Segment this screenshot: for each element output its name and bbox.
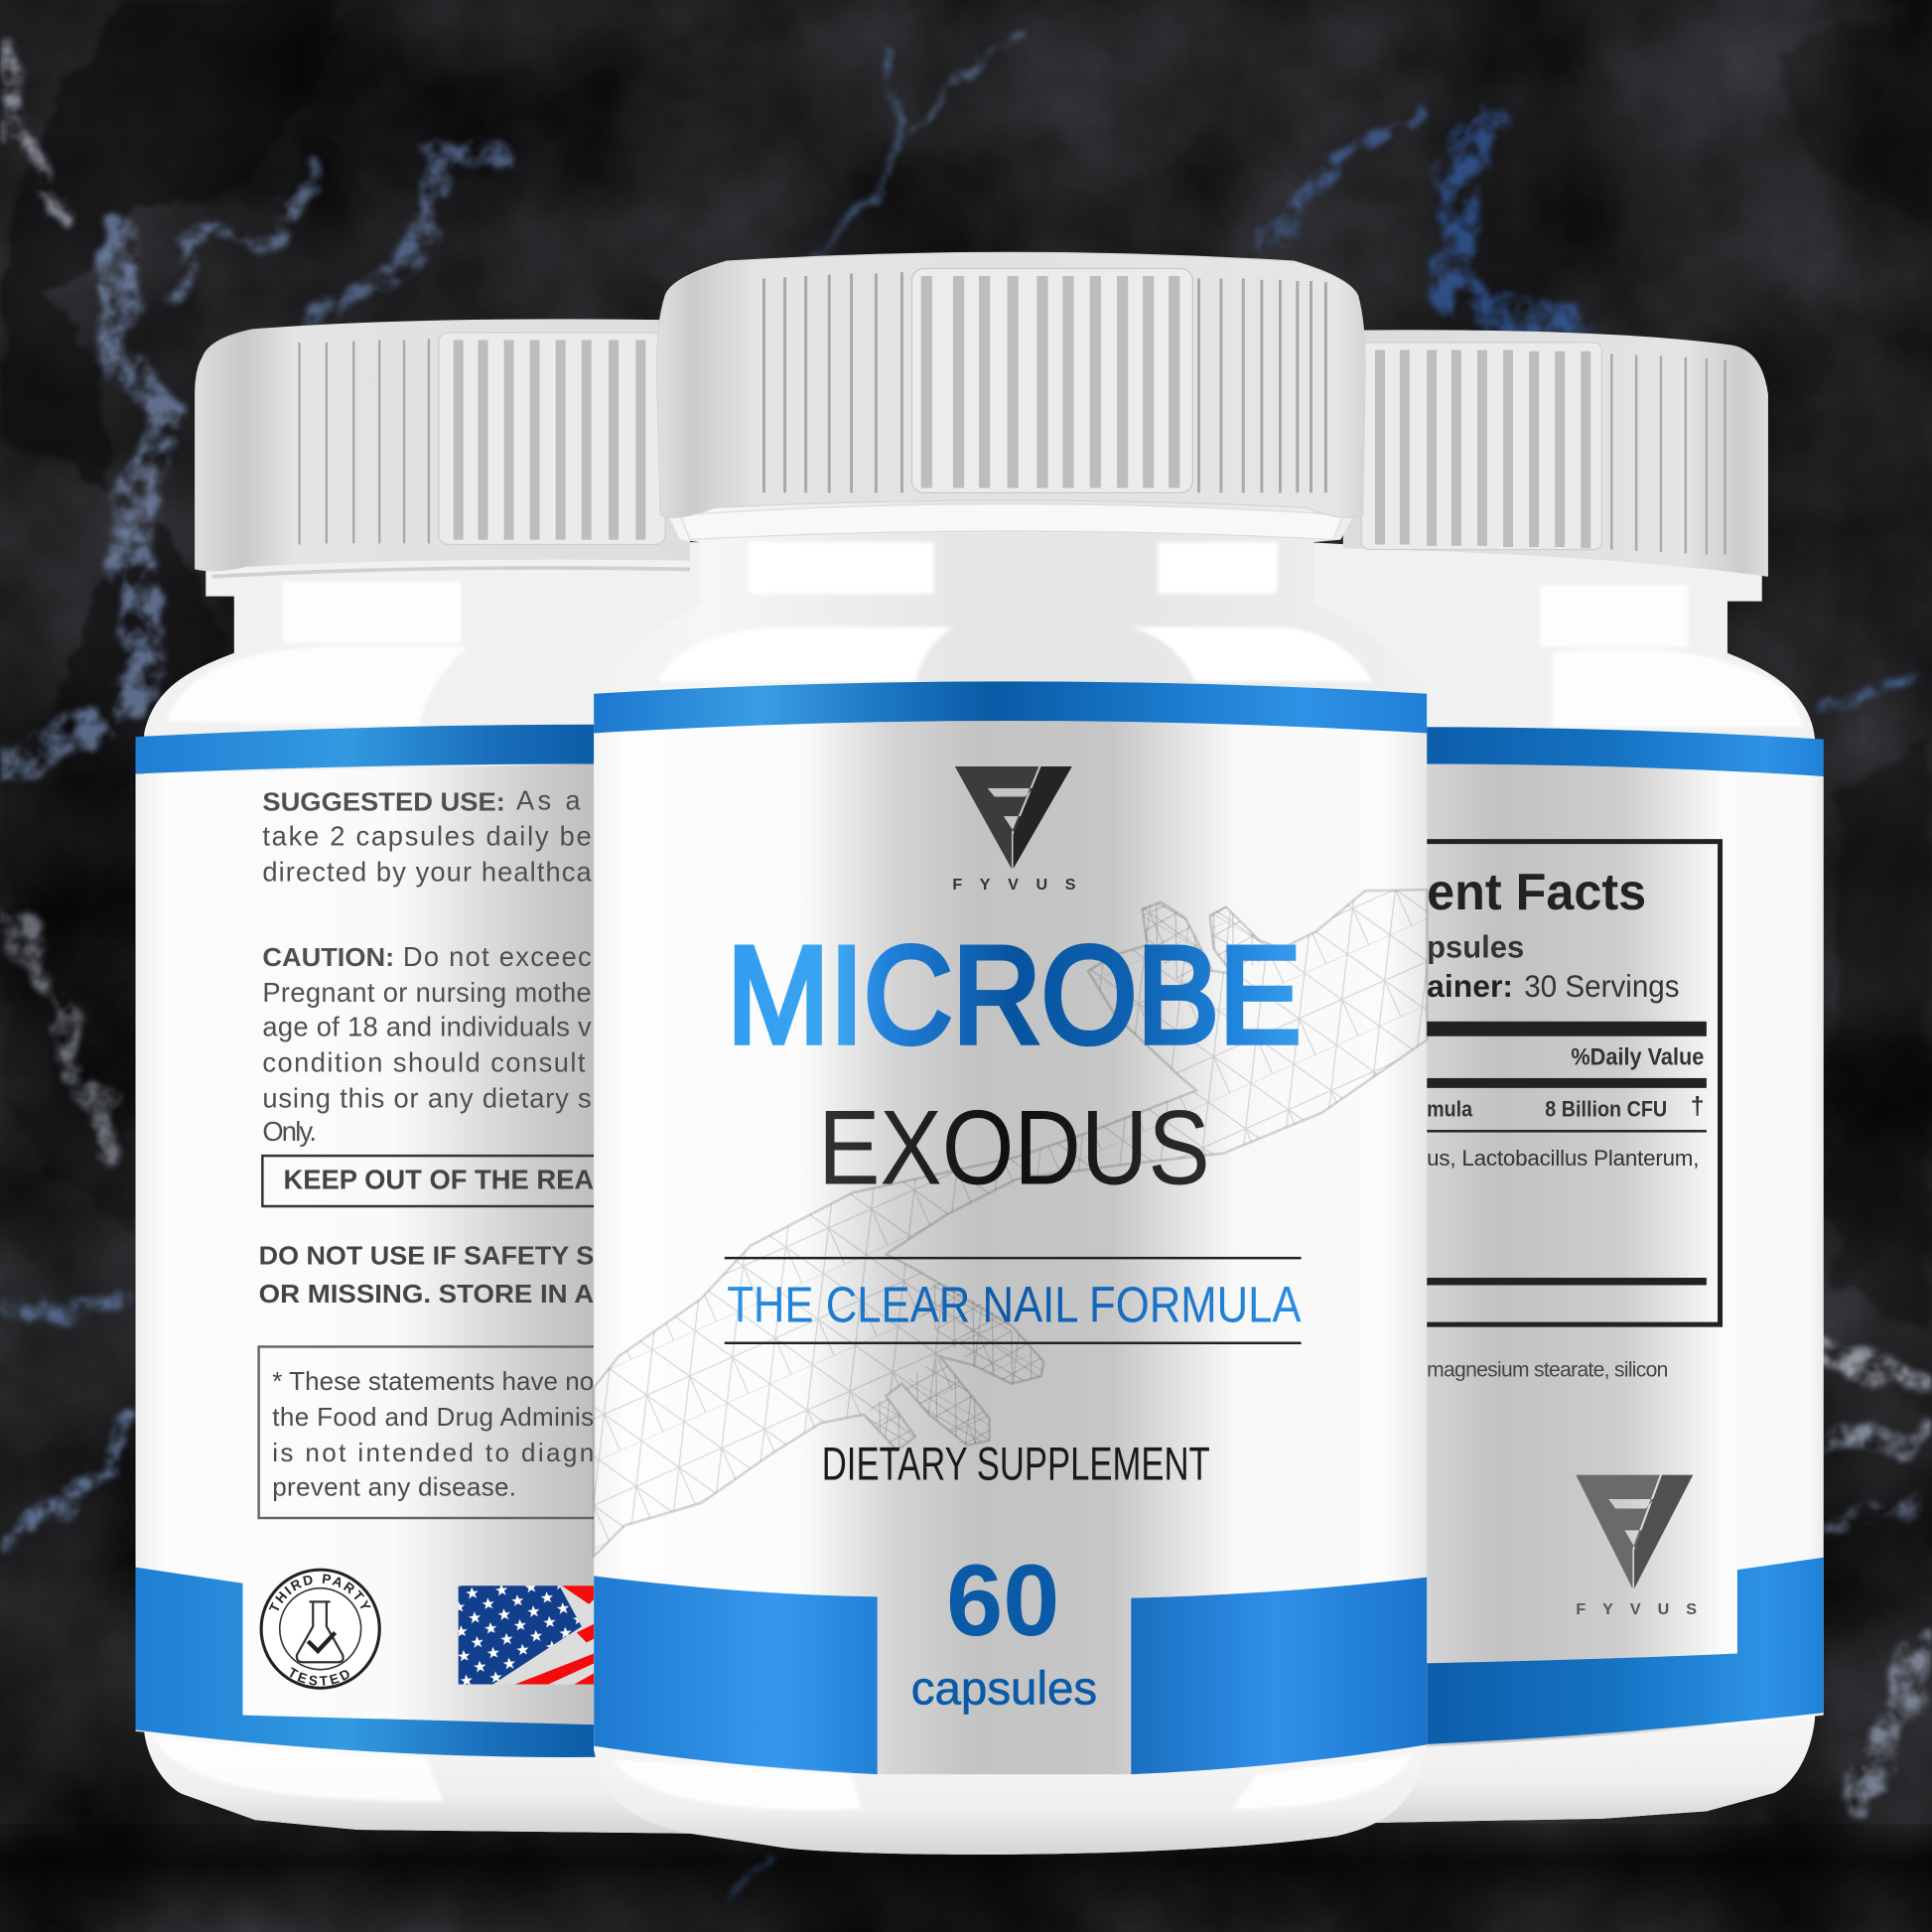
dietary supplement label: DIETARY SUPPLEMENT [822, 1438, 1210, 1490]
product subtitle: EXODUS [818, 1088, 1210, 1207]
hand wireframe illustration [594, 890, 1427, 1556]
tagline with rules: THE CLEAR NAIL FORMULA [727, 1277, 1302, 1333]
center bottle base shading [594, 1744, 1427, 1855]
supplement facts box: psules [1427, 929, 1524, 964]
suggested use text: directed by your healthca [262, 856, 593, 887]
right bottle neck highlight [1540, 586, 1805, 727]
caution text: CAUTION: [262, 942, 394, 972]
capsule count: capsules [911, 1661, 1097, 1714]
caution text: age of 18 and individuals v [262, 1012, 592, 1042]
suggested use text [262, 784, 593, 887]
icon: american flag [459, 1586, 613, 1685]
disclaimer box: the Food and Drug Adminis [272, 1402, 594, 1432]
right bottle label background [1417, 763, 1824, 1747]
center bottle neck ring [680, 504, 1343, 540]
safety warning text [259, 1240, 594, 1309]
bottom left blue block [594, 1576, 878, 1774]
bottom right blue block [1131, 1578, 1427, 1774]
icon: fyvus logo, back: FYVUS [1576, 1600, 1697, 1618]
caution text: condition should consult [262, 1047, 586, 1078]
right bottle bottom blue band [1417, 1558, 1824, 1744]
right bottle body [1307, 542, 1815, 1824]
icon: third party tested seal [260, 1569, 381, 1690]
left bottle neck highlight [167, 582, 469, 727]
disclaimer box: is not intended to diagn [272, 1438, 594, 1467]
center label background [594, 721, 1427, 1774]
supplement facts box: ent Facts [1427, 864, 1646, 921]
center top blue band [594, 681, 1427, 733]
left bottle bottom blue band [136, 1568, 604, 1757]
disclaimer box [259, 1346, 617, 1518]
product title: MICROBE [727, 918, 1302, 1072]
keep out of reach box: KEEP OUT OF THE REA [283, 1165, 594, 1195]
supplement facts box [1417, 842, 1721, 1324]
caution text: Do not exceec [403, 941, 592, 972]
left bottle: back panel [135, 319, 700, 1834]
caution text: Pregnant or nursing mothe [262, 977, 592, 1008]
left bottle cap [195, 319, 690, 577]
safety warning text: DO NOT USE IF SAFETY S [259, 1240, 594, 1270]
supplement facts box: mula [1427, 1096, 1473, 1121]
caution text: Only. [262, 1116, 317, 1147]
left bottle base shading [144, 1731, 690, 1834]
supplement facts box: %Daily Value [1571, 1043, 1704, 1069]
right bottle: supplement facts panel [1307, 330, 1824, 1824]
supplement facts box: ainer: [1427, 969, 1513, 1004]
other ingredients text: magnesium stearate, silicon [1427, 1358, 1668, 1381]
neck highlights [748, 542, 1278, 594]
darker marble patches [0, 0, 1932, 1330]
caution text [262, 941, 592, 1147]
disclaimer box: prevent any disease. [272, 1472, 516, 1502]
supplement facts box: us, Lactobacillus Planterum, [1427, 1146, 1699, 1171]
icon: third party tested seal: THIRD PARTY [268, 1574, 371, 1610]
disclaimer box: * These statements have no [272, 1366, 594, 1396]
capsule count: 60 [946, 1544, 1059, 1657]
left bottle label background [136, 763, 604, 1756]
left bottle base highlight [154, 1737, 444, 1801]
supplement facts box: † [1691, 1093, 1705, 1120]
icon: fyvus logo, front [952, 766, 1076, 894]
suggested use text: take 2 capsules daily be [262, 820, 592, 851]
center bottle body [594, 499, 1427, 1855]
keep out of reach box [262, 1156, 620, 1206]
right bottle top band [1417, 727, 1824, 776]
right bottle base shading [1330, 1716, 1815, 1824]
center bottle: front panel [594, 252, 1427, 1855]
safety warning text: OR MISSING. STORE IN A [259, 1279, 594, 1309]
suggested use text: SUGGESTED USE: [262, 787, 505, 817]
left bottle body [144, 542, 715, 1834]
capsule count [911, 1544, 1097, 1714]
left bottle top band [136, 725, 604, 773]
icon: fyvus logo, back [1576, 1475, 1697, 1618]
center bottle cap [656, 252, 1365, 517]
shoulder highlights [659, 627, 1371, 681]
icon: fyvus logo, front: FYVUS [952, 876, 1076, 894]
right bottle cap [1343, 330, 1768, 577]
suggested use text: As a [516, 784, 581, 815]
caution text: using this or any dietary s [262, 1083, 592, 1114]
icon: third party tested seal: TESTED [290, 1667, 349, 1686]
supplement facts box: 30 Servings [1524, 969, 1680, 1004]
supplement facts box: 8 Billion CFU [1545, 1096, 1667, 1121]
base highlights [613, 1756, 1411, 1810]
